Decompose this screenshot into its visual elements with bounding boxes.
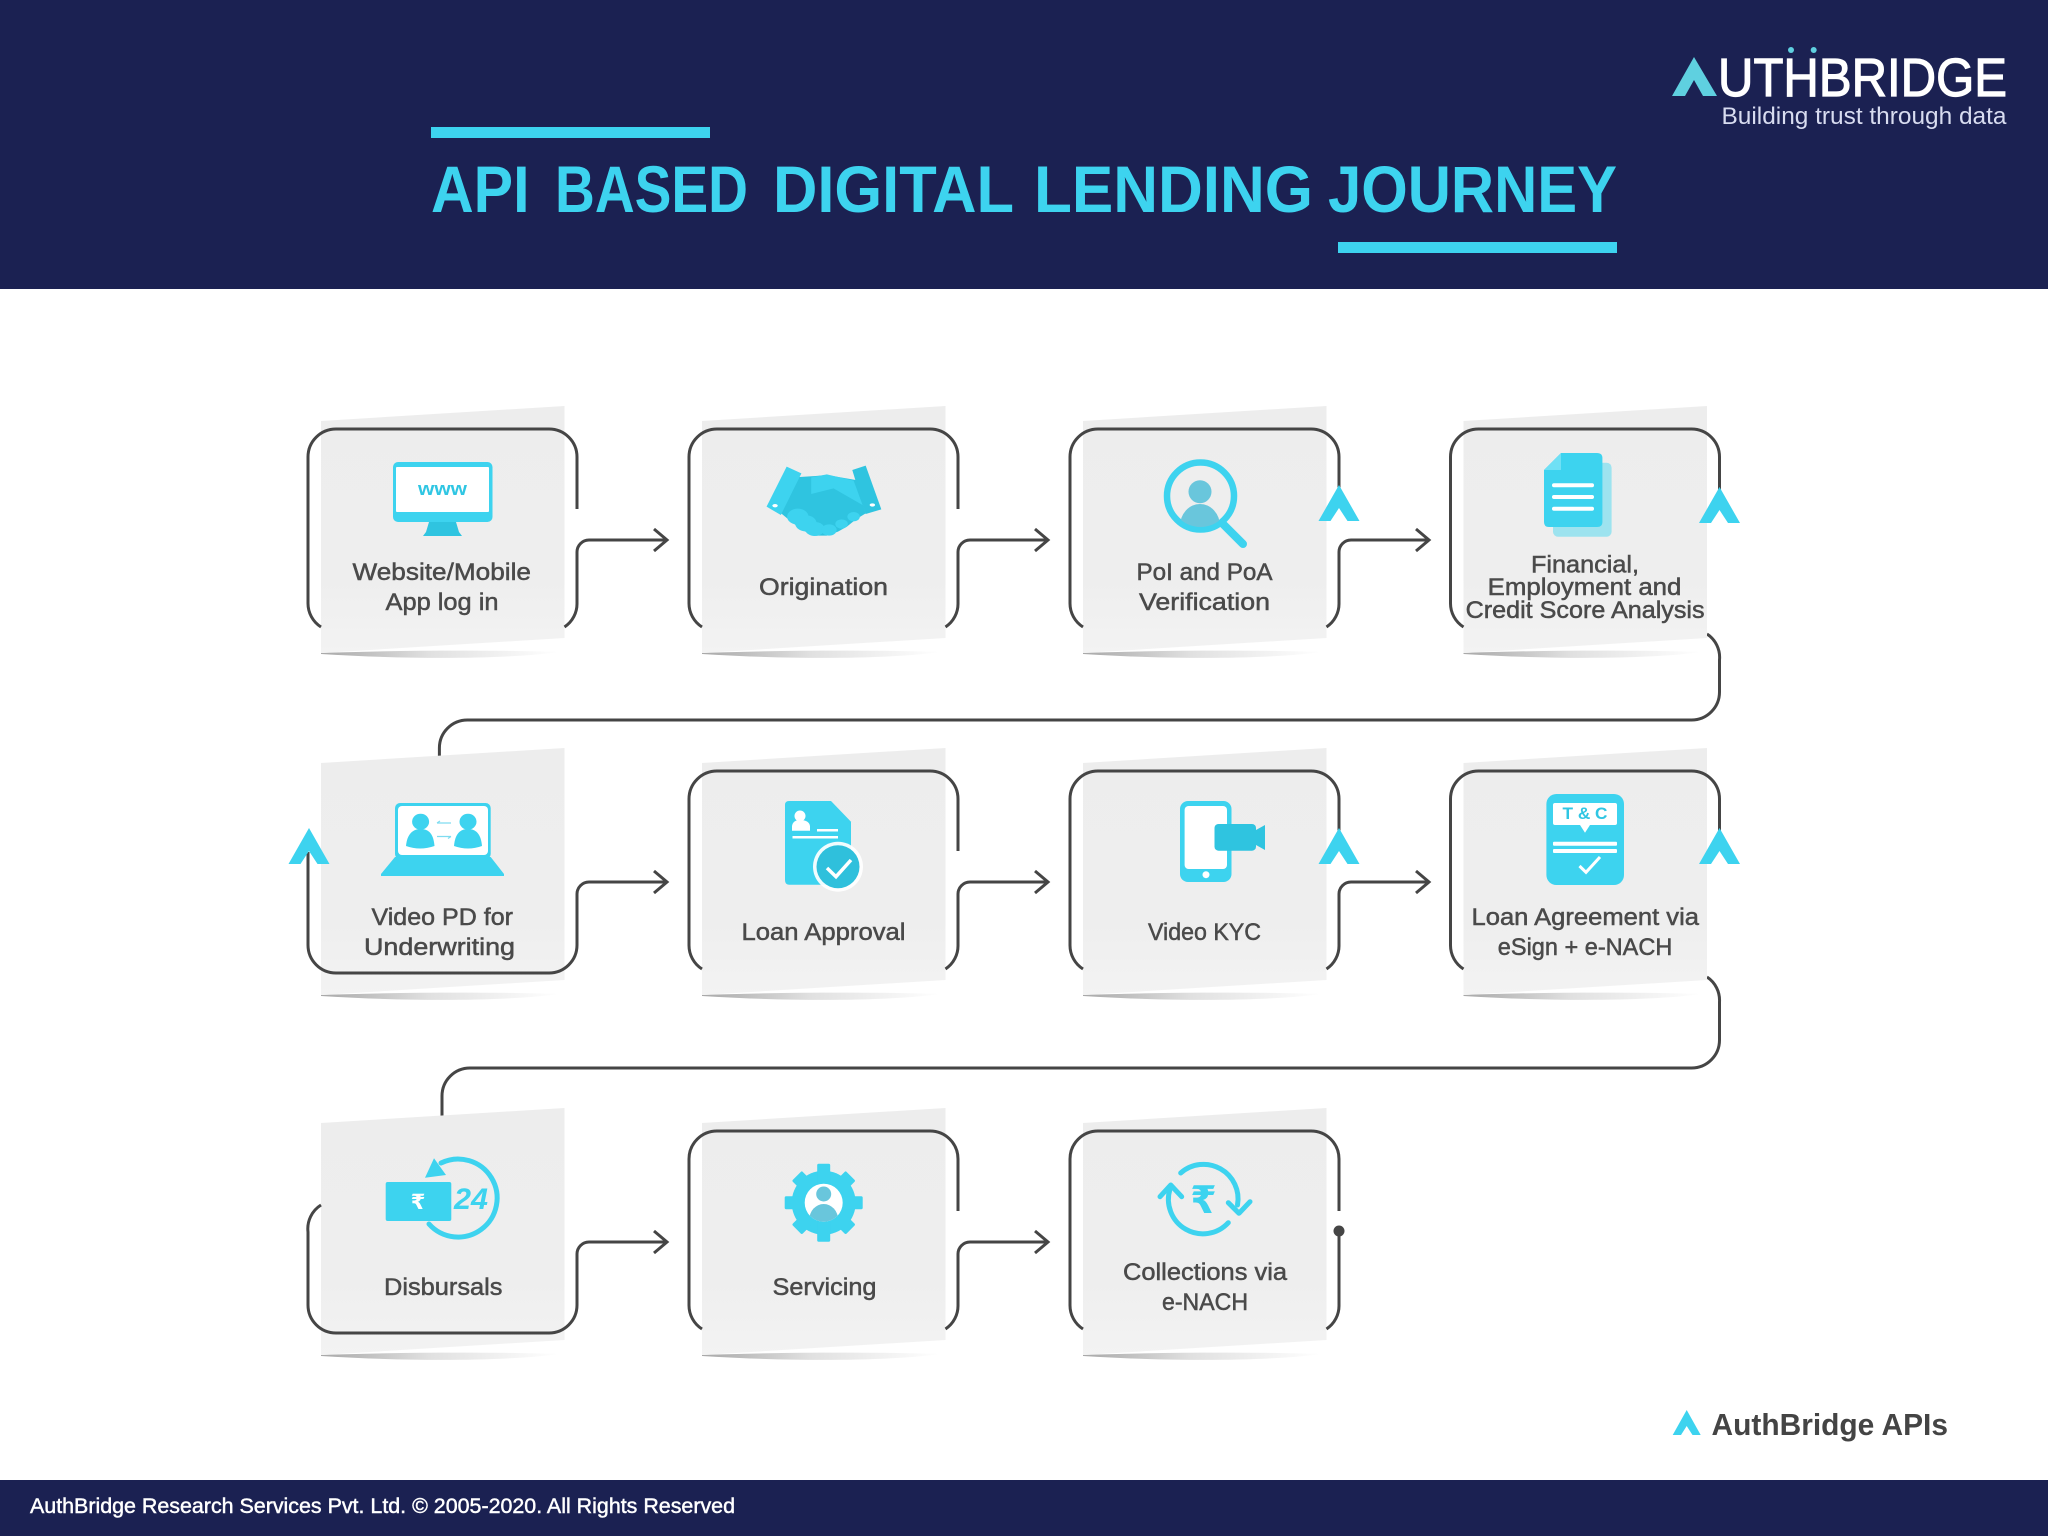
logo: AuthBridge: Building trust through data bbox=[1722, 103, 2007, 130]
arrow bbox=[308, 1205, 667, 1333]
marker bbox=[1699, 828, 1740, 864]
step 6: Loan Approval bbox=[689, 748, 1048, 1000]
label bbox=[1123, 1259, 1288, 1316]
icon: magnifier with person bbox=[1167, 462, 1243, 548]
step 8: Loan Agreement bbox=[1450, 748, 1740, 1000]
step 3: PoI and PoA Verification bbox=[1070, 406, 1429, 658]
title: JOURNEY bbox=[1328, 153, 1617, 226]
marker bbox=[1318, 828, 1360, 864]
label: Video PD for bbox=[372, 904, 513, 931]
marker bbox=[1699, 487, 1740, 523]
step 2: Origination bbox=[689, 406, 1048, 658]
icon: rupee cycle: ₹ bbox=[1190, 1178, 1217, 1222]
label: Credit Score Analysis bbox=[1466, 597, 1705, 624]
title bbox=[431, 153, 1617, 226]
step 11: Collections via e-NACH bbox=[1070, 1108, 1344, 1360]
label: Website/Mobile bbox=[352, 559, 531, 586]
step 1: Website/Mobile App log in bbox=[308, 406, 667, 658]
footer band bbox=[0, 1480, 2048, 1536]
label bbox=[1472, 904, 1700, 961]
label: e-NACH bbox=[1162, 1289, 1248, 1316]
label bbox=[1466, 552, 1705, 624]
icon: terms and conditions: T & C bbox=[1562, 804, 1608, 823]
arrow bbox=[946, 871, 1048, 969]
title: LENDING bbox=[1034, 153, 1313, 226]
label: Origination bbox=[759, 574, 888, 601]
label: App log in bbox=[386, 589, 498, 616]
icon: 24 hour money transfer: ₹ bbox=[411, 1190, 425, 1214]
marker bbox=[288, 828, 330, 864]
connector: row 2 to row 3 bbox=[442, 977, 1720, 1116]
label: eSign + e-NACH bbox=[1498, 934, 1672, 961]
arrow bbox=[564, 529, 667, 627]
arrow bbox=[946, 529, 1048, 627]
title: BASED bbox=[555, 153, 748, 226]
logo: AuthBridge bbox=[1672, 47, 2007, 130]
step 9: Disbursals bbox=[308, 1108, 667, 1360]
step 10: Servicing bbox=[689, 1108, 1048, 1360]
icon: gear with person bbox=[785, 1164, 863, 1242]
step 7: Video KYC bbox=[1070, 748, 1429, 1000]
end line with dot bbox=[1326, 1226, 1344, 1329]
label bbox=[1136, 559, 1272, 616]
arrow bbox=[946, 1231, 1048, 1329]
icon: monitor bbox=[393, 462, 492, 536]
title accent bar top bbox=[431, 127, 710, 138]
title accent bar bottom bbox=[1338, 242, 1617, 253]
icon: document bbox=[1544, 453, 1612, 537]
icon: 24 hour money transfer: 24 bbox=[453, 1183, 488, 1216]
label: Loan Agreement via bbox=[1472, 904, 1700, 931]
icon: monitor: www bbox=[417, 479, 468, 499]
icon: terms and conditions bbox=[1546, 794, 1624, 885]
label: PoI and PoA bbox=[1136, 559, 1272, 586]
icon: laptop video call bbox=[381, 803, 504, 876]
arrow bbox=[308, 852, 667, 973]
icon: phone with camera bbox=[1180, 801, 1265, 882]
arrow bbox=[1326, 529, 1429, 627]
arrow bbox=[1326, 871, 1429, 969]
connector: row 1 to row 2 bbox=[439, 634, 1720, 757]
title: API bbox=[431, 153, 530, 226]
label bbox=[352, 559, 531, 616]
footer text: AuthBridge Research Services Pvt. Ltd. © 2005-2020. All Rights Reserved bbox=[30, 1495, 735, 1518]
marker bbox=[1318, 485, 1360, 521]
step 4: Financial analysis bbox=[1450, 406, 1740, 658]
icon: approved document bbox=[785, 801, 863, 892]
label: Servicing bbox=[772, 1274, 876, 1301]
title: DIGITAL bbox=[773, 153, 1014, 226]
label: Financial, bbox=[1531, 552, 1639, 578]
label: Loan Approval bbox=[742, 919, 906, 946]
label: Disbursals bbox=[384, 1274, 502, 1301]
icon: handshake bbox=[767, 466, 881, 536]
label: Collections via bbox=[1123, 1259, 1288, 1286]
icon: 24 hour money transfer bbox=[386, 1158, 497, 1237]
icon: rupee cycle bbox=[1160, 1164, 1250, 1234]
label: Employment and bbox=[1488, 574, 1681, 601]
header band bbox=[0, 0, 2048, 289]
label bbox=[364, 904, 515, 961]
logo: AuthBridge: UTHBRIDGE bbox=[1718, 48, 2007, 108]
step 5: Video PD for Underwriting bbox=[288, 748, 667, 1000]
label: Verification bbox=[1139, 589, 1270, 616]
brand: AuthBridge APIs: AuthBridge APIs bbox=[1712, 1407, 1948, 1442]
label: Video KYC bbox=[1148, 919, 1261, 946]
label: Underwriting bbox=[364, 934, 515, 961]
